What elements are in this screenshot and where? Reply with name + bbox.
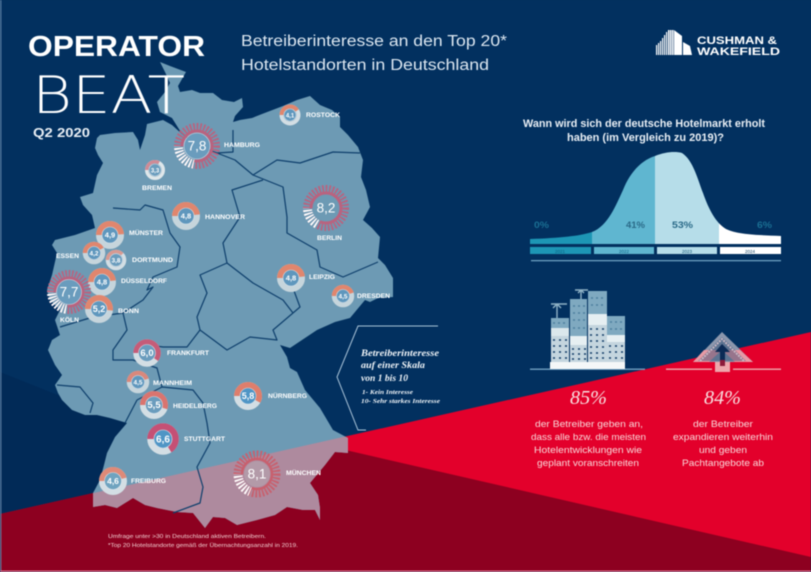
gauge: Mannheim 4,5: 4,5 [133, 380, 143, 386]
gauge: Bonn 5,2: 5,2 [93, 304, 105, 314]
city labels: HAMBURG [224, 142, 260, 149]
gauge: Essen 4,2: 4,2 [89, 250, 99, 258]
gauge: Münster 4,9 [99, 224, 121, 246]
gauge: Hamburg 7,8: 7,8 [188, 138, 206, 154]
gauge: Frankfurt 6,0 [136, 342, 158, 364]
city labels: FRANKFURT [167, 350, 209, 357]
logo: Cushman & Wakefield [656, 30, 780, 58]
gauge: Leipzig 4,8: 4,8 [286, 274, 296, 283]
logo: Cushman & Wakefield: WAKEFIELD [697, 46, 780, 58]
gauge: Heidelberg 5,5: 5,5 [147, 400, 161, 411]
gauge: Berlin 8,2 [308, 190, 344, 226]
gauge: Dresden 4,5: 4,5 [338, 294, 348, 300]
title [28, 31, 205, 140]
footnote: *Top 20 Hotelstandorte gemäß der Übernachtungsanzahl in 2019. [108, 542, 299, 549]
city labels: DRESDEN [357, 293, 390, 300]
callout: scale legend: 10- Sehr starkes Interesse [361, 399, 440, 405]
city labels: BREMEN [142, 185, 172, 192]
map of Germany [47, 62, 393, 528]
subtitle: Hotelstandorten in Deutschland [241, 57, 489, 74]
gauge: Köln 7,7 [52, 274, 86, 310]
subtitle [241, 33, 507, 74]
gauge: Berlin 8,2: 8,2 [317, 200, 335, 216]
heading: recovery question [523, 118, 765, 144]
gauge: Stuttgart 6,6 [150, 426, 176, 452]
city labels: HEIDELBERG [173, 403, 217, 410]
stat: 84%: der Betreiber [693, 419, 753, 430]
gauge: München 8,1 [238, 455, 276, 493]
chart: recovery bell curve: 2024 [745, 249, 756, 254]
gauge: Frankfurt 6,0: 6,0 [140, 348, 154, 359]
city labels: STUTTGART [184, 436, 225, 443]
title: BEAT [32, 66, 185, 126]
logo: Cushman & Wakefield: CUSHMAN & [697, 35, 777, 47]
icon: upward arrow expansion [666, 332, 781, 372]
city labels: LEIPZIG [309, 274, 335, 281]
stat: 84%: Pachtangebote ab [682, 458, 764, 469]
stat: 85%: dass alle bzw. die meisten [531, 432, 646, 443]
subtitle: Betreiberinteresse an den Top 20* [241, 33, 507, 50]
gauge: Düsseldorf 4,8: 4,8 [97, 278, 107, 287]
icon: buildings under construction [530, 290, 645, 370]
gauge: Düsseldorf 4,8 [91, 271, 113, 293]
stat: 84% [673, 387, 773, 469]
stat: 85% [531, 387, 646, 469]
city labels: FREIBURG [131, 478, 166, 485]
gauge: Hannover 4,8: 4,8 [181, 212, 191, 221]
gauge: Hannover 4,8 [175, 205, 197, 227]
stat: 85%: 85% [570, 387, 607, 409]
gauge: Münster 4,9: 4,9 [105, 231, 115, 240]
gauge: Dortmund 3,8 [108, 252, 124, 268]
footnote: Umfrage unter >30 in Deutschland aktiven Betreibern. [108, 534, 267, 540]
stat: 85%: Hotelentwicklungen wie [534, 445, 642, 456]
gauge: Leipzig 4,8 [280, 267, 302, 289]
callout: scale legend: von 1 bis 10 [361, 374, 408, 384]
city labels: HANNOVER [205, 214, 245, 221]
gauge: Hamburg 7,8 [178, 128, 216, 164]
city labels: ESSEN [56, 253, 79, 260]
city labels: NÜRNBERG [268, 391, 307, 400]
heading: recovery question: Wann wird sich der deutsche Hotelmarkt erholt [523, 118, 765, 130]
city labels: MANNHEIM [153, 380, 192, 387]
gauge: Köln 7,7: 7,7 [60, 284, 78, 300]
gauge: Rostock 4,1 [282, 106, 298, 124]
gauge: Freiburg 4,6 [102, 470, 124, 492]
chart: recovery bell curve: 41% [626, 220, 646, 231]
city labels: BONN [118, 308, 140, 315]
gauge: Rostock 4,1: 4,1 [286, 114, 295, 120]
gauge: Bremen 3,3 [147, 162, 163, 178]
chart: recovery bell curve: 2022 [619, 249, 630, 254]
callout: scale legend: Betreiberinteresse [360, 349, 440, 359]
callout: scale legend [337, 326, 440, 430]
gauge: Dresden 4,5 [334, 287, 352, 305]
city labels: KÖLN [60, 315, 79, 324]
chart: recovery bell curve: 6% [757, 220, 773, 231]
stat: 85%: der Betreiber geben an, [535, 419, 643, 430]
chart: recovery bell curve: 53% [672, 220, 694, 231]
footnote [108, 534, 299, 549]
city labels: ROSTOCK [306, 112, 340, 119]
gauge: Stuttgart 6,6: 6,6 [156, 434, 170, 445]
city labels: BERLIN [317, 235, 342, 242]
chart: recovery bell curve: 2021 [555, 249, 566, 254]
callout: scale legend: auf einer Skala [361, 361, 425, 371]
gauge: Mannheim 4,5 [129, 373, 147, 391]
stat: 84%: und geben [699, 445, 747, 456]
stat: 84%: expandieren weiterhin [673, 432, 773, 443]
chart: recovery bell curve: 2023 [682, 249, 693, 254]
callout: scale legend: 1- Kein Interesse [362, 390, 413, 396]
gauge: München 8,1: 8,1 [248, 466, 266, 482]
gauge: Nürnberg 5,8 [237, 385, 259, 407]
city labels: MÜNCHEN [286, 468, 321, 477]
gauge: Bonn 5,2 [88, 298, 110, 320]
gauge: Dortmund 3,8: 3,8 [111, 258, 121, 264]
gauge: Essen 4,2 [85, 244, 103, 262]
gauge: Nürnberg 5,8: 5,8 [242, 391, 254, 401]
city labels: MÜNSTER [129, 228, 163, 237]
heading: recovery question: haben (im Vergleich zu 2019)? [567, 132, 724, 144]
chart: recovery bell curve [530, 150, 781, 261]
city labels: DORTMUND [132, 257, 173, 264]
title: Q2 2020 [33, 126, 90, 140]
stat: 85%: geplant voranschreiten [537, 458, 639, 469]
chart: recovery bell curve: 0% [534, 220, 550, 231]
city labels: DÜSSELDORF [121, 276, 167, 285]
title: OPERATOR [28, 31, 205, 63]
stat: 84%: 84% [704, 387, 741, 409]
gauge: Freiburg 4,6: 4,6 [107, 476, 119, 486]
gauge: Bremen 3,3: 3,3 [151, 168, 160, 174]
gauge: Heidelberg 5,5 [143, 394, 165, 416]
city labels [56, 112, 390, 485]
